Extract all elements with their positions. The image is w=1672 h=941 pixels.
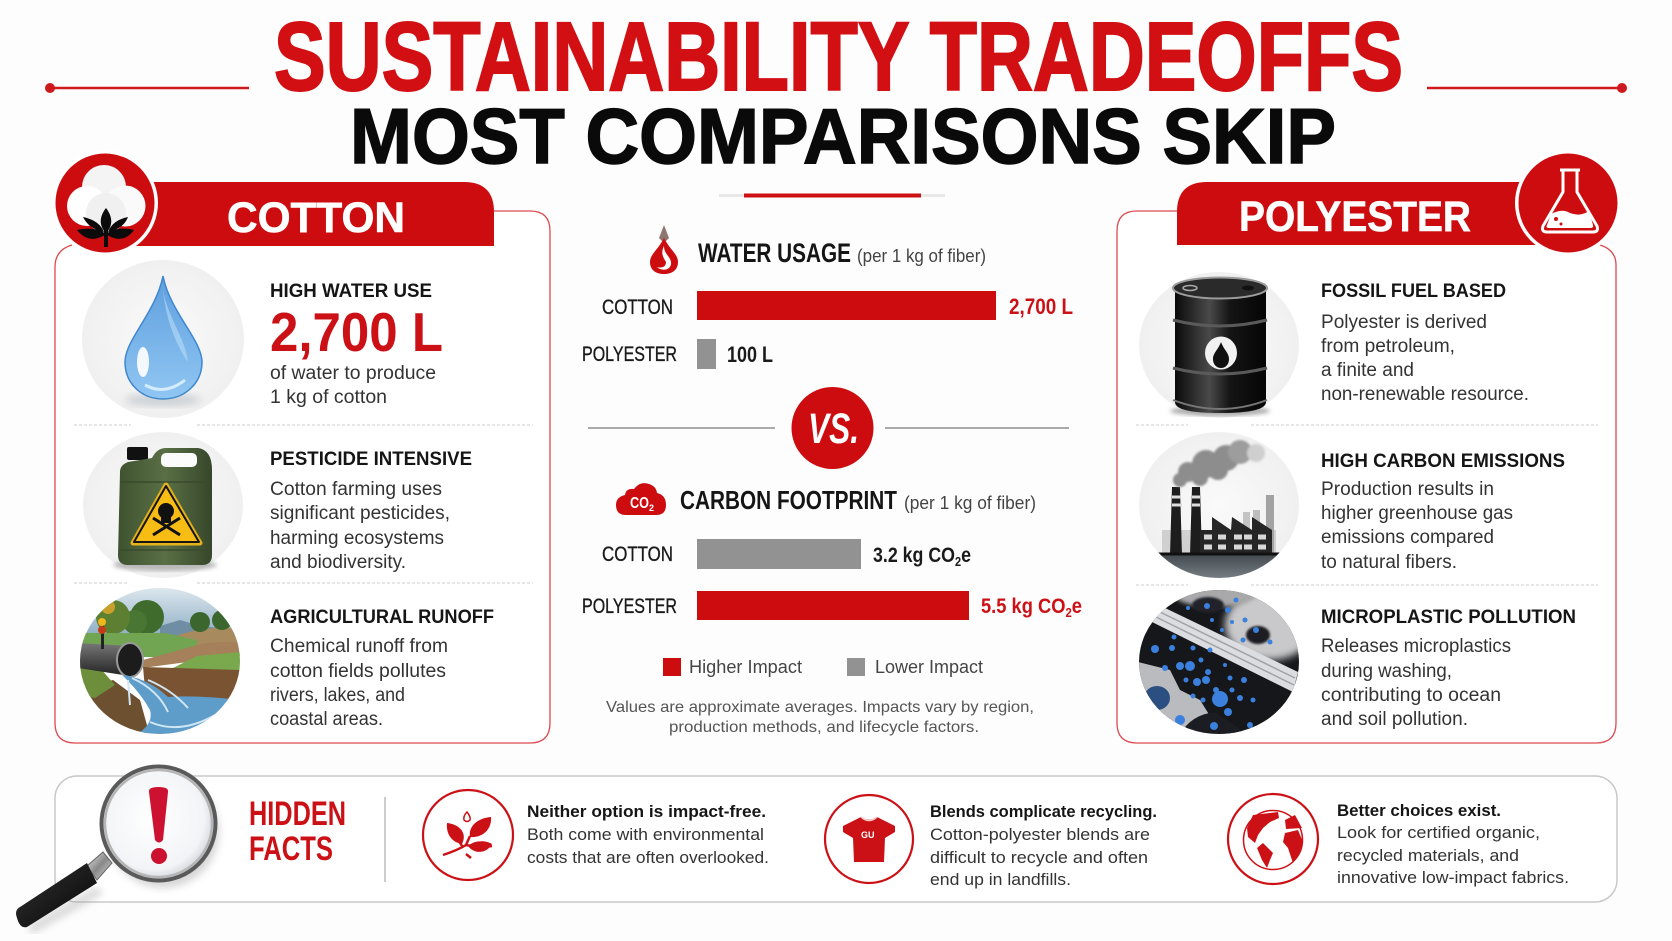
chart: carbon footprint: 2 (955, 554, 961, 569)
chart: water usage: POLYESTER (582, 343, 677, 366)
icon: co2 cloud (616, 483, 666, 515)
item: high water use: 1 kg of cotton (270, 387, 387, 408)
panel: polyester (1117, 150, 1621, 743)
item: high carbon emissions: HIGH CARBON EMISSIONS (1321, 451, 1565, 472)
item: fossil fuel based: a finite and (1321, 360, 1414, 381)
chart: carbon footprint: POLYESTER (582, 595, 677, 618)
item: high carbon emissions: higher greenhouse gas (1321, 503, 1513, 524)
chart: carbon footprint: 5.5 kg CO (981, 595, 1078, 618)
item: high water use (82, 260, 443, 418)
hidden facts heading: FACTS (249, 830, 333, 868)
icon: co2 cloud: CO (630, 495, 649, 512)
fact: neither option is impact-free: Both come with environmental (527, 825, 764, 844)
chart: carbon footprint: 2 (1065, 605, 1072, 620)
legend: Higher Impact (689, 657, 802, 677)
polyester heading: POLYESTER (1239, 193, 1471, 241)
icon: cotton boll (52, 150, 158, 256)
item: pesticide intensive: harming ecosystems (270, 528, 444, 549)
icon: t-shirt (825, 795, 913, 883)
item: high water use: 2,700 L (270, 301, 443, 363)
fact: neither option is impact-free: Neither option is impact-free. (527, 802, 766, 821)
item: agricultural runoff: cotton fields pollutes (270, 661, 446, 682)
chart: carbon footprint: e (961, 544, 971, 567)
item: agricultural runoff: coastal areas. (270, 709, 383, 730)
item: high carbon emissions (1139, 432, 1565, 590)
icon: factory (1139, 432, 1299, 590)
legend: Lower Impact (875, 657, 983, 677)
fact: neither option is impact-free (423, 790, 769, 880)
item: high carbon emissions: Production results in (1321, 479, 1494, 500)
cotton heading: COTTON (227, 194, 405, 242)
bar: polyester water (697, 339, 716, 369)
chart: water usage (582, 225, 1073, 369)
legend (663, 657, 983, 677)
item: fossil fuel based: from petroleum, (1321, 336, 1455, 357)
title (274, 2, 1403, 180)
fact: better choices exist: Better choices exist. (1337, 801, 1501, 820)
item: fossil fuel based: non-renewable resource. (1321, 384, 1529, 405)
footnote (606, 699, 1034, 736)
cotton header banner (130, 182, 494, 246)
item: high water use: of water to produce (270, 363, 436, 384)
fact: better choices exist: recycled materials, and (1337, 846, 1519, 865)
fact: neither option is impact-free: costs that are often overlooked. (527, 848, 769, 867)
fact: better choices exist (1228, 794, 1569, 887)
chart: water usage: 100 L (727, 342, 773, 367)
fact: blends complicate recycling: Blends complicate recycling. (930, 802, 1157, 821)
item: high carbon emissions: to natural fibers. (1321, 552, 1457, 573)
icon: water drop (82, 260, 244, 418)
bar: polyester carbon (697, 591, 969, 620)
icon: co2 cloud: 2 (649, 503, 654, 513)
panel: cotton (52, 150, 550, 743)
vs badge (588, 387, 1069, 469)
chart: carbon footprint: 3.2 kg CO (873, 544, 970, 567)
title: SUSTAINABILITY TRADEOFFS (274, 2, 1403, 111)
chart: carbon footprint: COTTON (602, 543, 673, 566)
footnote: production methods, and lifecycle factors. (669, 719, 979, 736)
item: microplastic pollution: during washing, (1321, 661, 1452, 682)
item: pesticide intensive: significant pesticides, (270, 503, 450, 524)
icon: magnifying glass (16, 766, 219, 930)
fact: blends complicate recycling: difficult to recycle and often (930, 848, 1148, 867)
icon: microplastics on fiber (1139, 590, 1299, 734)
item: agricultural runoff: rivers, lakes, and (270, 685, 405, 706)
bar: cotton carbon (697, 539, 861, 569)
item: pesticide intensive: PESTICIDE INTENSIVE (270, 449, 472, 470)
icon: water usage drop (650, 225, 678, 274)
item: fossil fuel based (1139, 272, 1529, 418)
polyester header banner (1177, 182, 1545, 245)
item: microplastic pollution (1138, 583, 1576, 740)
chart: water usage: (per 1 kg of fiber) (857, 246, 986, 266)
item: fossil fuel based: FOSSIL FUEL BASED (1321, 281, 1506, 302)
item: pesticide intensive: and biodiversity. (270, 552, 406, 573)
item: agricultural runoff (78, 586, 494, 740)
fact: blends complicate recycling: Cotton-polyester blends are (930, 825, 1150, 844)
title: MOST COMPARISONS SKIP (350, 92, 1336, 180)
item: pesticide intensive: Cotton farming uses (270, 479, 442, 500)
item: microplastic pollution: and soil pollution. (1321, 709, 1468, 730)
icon: plant leaves (423, 790, 513, 880)
footnote: Values are approximate averages. Impacts vary by region, (606, 699, 1034, 716)
item: microplastic pollution: MICROPLASTIC POLLUTION (1321, 607, 1576, 628)
hidden facts heading (249, 795, 346, 868)
item: pesticide intensive (83, 432, 472, 578)
fact: blends complicate recycling: end up in landfills. (930, 870, 1071, 889)
item: agricultural runoff: Chemical runoff from (270, 636, 448, 657)
chart: water usage: COTTON (602, 296, 673, 319)
icon: oil barrel (1139, 272, 1299, 418)
icon: pesticide canister (83, 432, 243, 578)
icon: t-shirt: GU (861, 830, 874, 840)
panel: hidden facts (16, 766, 1617, 930)
vs badge: VS. (808, 405, 859, 453)
item: microplastic pollution: Releases microplastics (1321, 636, 1511, 657)
icon: globe (1228, 794, 1318, 884)
chart: carbon footprint: CARBON FOOTPRINT (680, 485, 897, 515)
chart: water usage: 2,700 L (1009, 294, 1073, 319)
chart: carbon footprint: (per 1 kg of fiber) (904, 493, 1036, 513)
item: agricultural runoff: AGRICULTURAL RUNOFF (270, 607, 494, 628)
item: high water use: HIGH WATER USE (270, 281, 432, 302)
fact: better choices exist: innovative low-impact fabrics. (1337, 868, 1569, 887)
fact: better choices exist: Look for certified organic, (1337, 823, 1540, 842)
icon: flask (1515, 150, 1621, 256)
item: microplastic pollution: contributing to ocean (1321, 685, 1501, 706)
chart: carbon footprint (582, 483, 1082, 620)
hidden facts heading: HIDDEN (249, 795, 346, 833)
fact: blends complicate recycling (825, 795, 1157, 889)
chart: water usage: WATER USAGE (698, 238, 851, 268)
item: high carbon emissions: emissions compared (1321, 527, 1494, 548)
bar: cotton water (697, 291, 996, 320)
icon: pipe runoff scene (78, 586, 244, 740)
chart: carbon footprint: e (1072, 595, 1082, 618)
item: fossil fuel based: Polyester is derived (1321, 312, 1487, 333)
